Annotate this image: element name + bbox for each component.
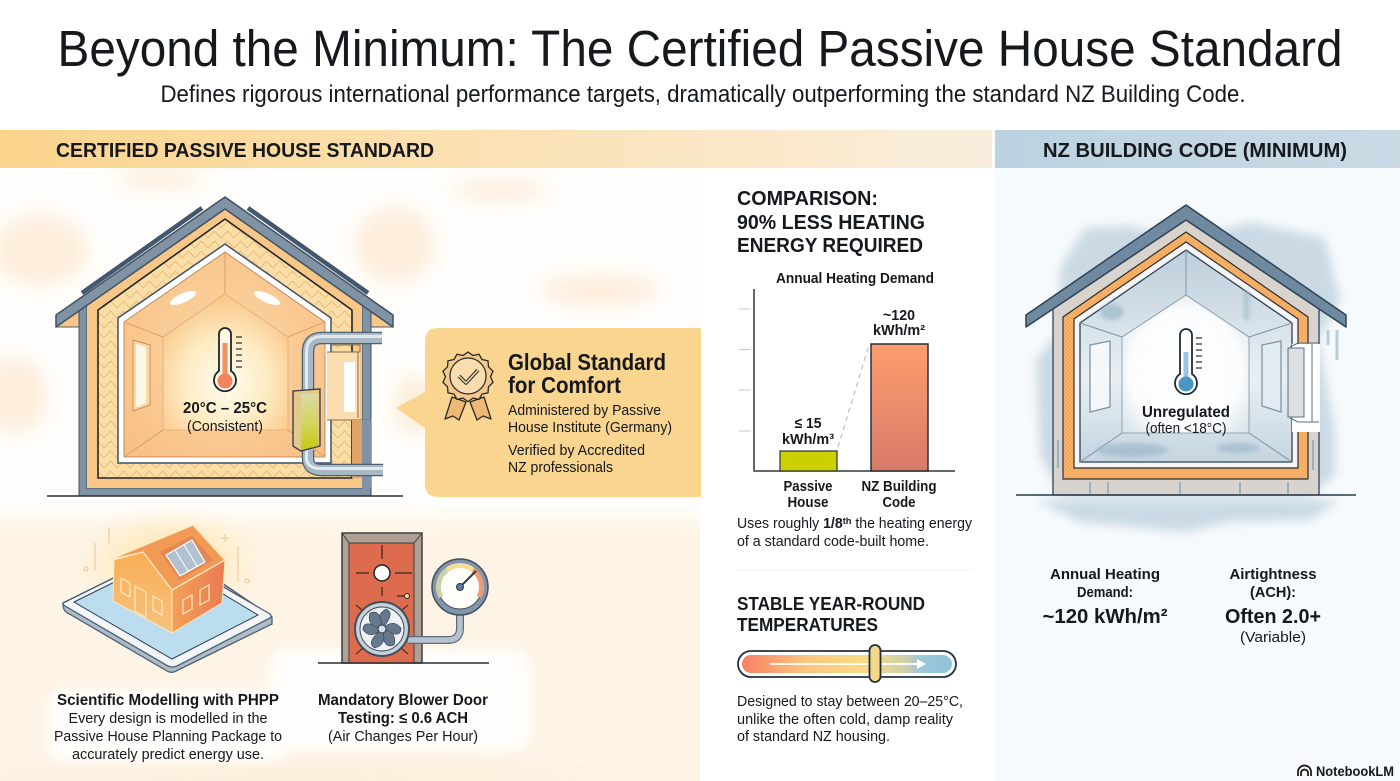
callout text: NZ professionals	[508, 460, 613, 476]
illustration: passive house cross-section	[47, 197, 403, 496]
callout text: House Institute (Germany)	[508, 420, 672, 436]
temperature label: Unregulated	[1142, 404, 1230, 421]
text: blower door testing: (Air Changes Per Hour)	[328, 729, 478, 745]
door markings	[374, 565, 390, 581]
temperature label: 20°C – 25°C	[183, 400, 267, 417]
sparkles	[95, 527, 238, 582]
heading: comparison: 90% LESS HEATING	[737, 212, 925, 234]
axis labels: House	[788, 495, 828, 511]
outer walls	[1053, 220, 1319, 495]
axis labels: NZ Building	[862, 479, 936, 495]
text: blower door testing	[318, 692, 488, 745]
illustration: house model on tablet	[63, 503, 272, 672]
value: nz building code: kWh/m²	[873, 323, 925, 339]
watermark: notebooklm: NotebookLM	[1316, 763, 1394, 779]
floor damp patches	[1096, 290, 1260, 457]
text: chart caption	[737, 516, 973, 550]
roof	[56, 197, 393, 327]
value: nz building code	[873, 307, 925, 339]
insulation band	[87, 207, 362, 488]
ground line	[47, 495, 403, 497]
ground line	[1016, 494, 1356, 496]
text: chart caption: th	[843, 516, 852, 527]
value: nz building code: ~120	[883, 307, 915, 324]
section header: certified passive house standard	[0, 130, 992, 168]
outer wall	[79, 302, 371, 496]
right window	[1262, 341, 1281, 412]
callout: global standard for comfort	[396, 328, 701, 497]
stat: annual heating demand	[1042, 566, 1168, 628]
text: chart caption: Uses roughly 1/8	[737, 516, 843, 532]
gauge tube	[408, 615, 460, 640]
damp stains behind house	[1035, 222, 1340, 532]
text: scientific modelling: Scientific Modelling with PHPP	[57, 692, 279, 709]
model windows	[121, 578, 209, 617]
thermometer	[214, 328, 242, 391]
text: scientific modelling	[54, 692, 282, 763]
drips	[1328, 330, 1337, 360]
subtitle: Defines rigorous international performance targets, dramatically outperforming the standard NZ Building Code.	[160, 81, 1246, 108]
axis labels: Code	[882, 495, 916, 511]
text: scientific modelling: Every design is modelled in the	[68, 711, 268, 727]
callout text: Verified by Accredited	[508, 443, 645, 459]
callout text: Global Standard	[508, 349, 666, 375]
section header: nz building code: NZ BUILDING CODE (MINIMUM)	[1043, 140, 1347, 162]
stat: annual heating demand: ~120 kWh/m²	[1042, 606, 1168, 628]
stat: annual heating demand: Annual Heating	[1050, 566, 1160, 583]
fan	[355, 602, 409, 656]
stat: airtightness: (Variable)	[1240, 629, 1306, 646]
heat recovery unit	[293, 389, 320, 451]
axis labels	[784, 479, 936, 511]
stat: airtightness: (ACH):	[1250, 584, 1296, 601]
solar panels	[82, 208, 368, 293]
solar panel	[160, 536, 213, 580]
callout text: Administered by Passive	[508, 403, 661, 419]
stat: annual heating demand: Demand:	[1077, 584, 1133, 601]
stat: airtightness: Often 2.0+	[1225, 606, 1321, 628]
background wash: left panel	[0, 168, 700, 781]
temperature slider	[738, 645, 956, 682]
slider thumb	[870, 645, 880, 682]
heading: comparison	[737, 188, 925, 257]
insulation layer	[1063, 232, 1308, 479]
text: blower door testing: Testing: ≤ 0.6 ACH	[338, 710, 468, 727]
text: chart caption: the heating energy	[851, 516, 973, 532]
ceiling lights	[168, 288, 198, 308]
bar: passive house	[780, 451, 837, 471]
right window opening	[327, 352, 360, 420]
text: blower door testing: Mandatory Blower Door	[318, 692, 488, 709]
ventilation ducts	[308, 338, 382, 392]
eaves	[56, 306, 393, 327]
bar: nz building code	[871, 344, 928, 471]
door ground line	[318, 662, 489, 664]
heading: stable year-round temperatures	[737, 593, 925, 635]
illustration: nz code house cross-section: (often <18°C)	[1146, 421, 1226, 437]
value: passive house	[782, 415, 834, 448]
icon: rosette badge	[443, 352, 493, 420]
chart title: Annual Heating Demand	[776, 271, 934, 287]
tablet	[63, 549, 272, 672]
section header: certified passive house standard: CERTIFIED PASSIVE HOUSE STANDARD	[56, 140, 434, 162]
text: slider caption: of standard NZ housing.	[737, 729, 890, 745]
heading: stable year-round temperatures: STABLE YEAR-ROUND	[737, 593, 925, 614]
value: passive house: kWh/m³	[782, 432, 834, 448]
background wash: right panel	[995, 168, 1400, 781]
model house	[113, 552, 172, 633]
wall opening	[1292, 344, 1320, 432]
callout text: for Comfort	[508, 372, 621, 398]
door	[349, 543, 414, 663]
text: scientific modelling: Passive House Planning Package to	[54, 729, 282, 745]
illustration: passive house cross-section: (Consistent)	[187, 419, 263, 435]
title: Beyond the Minimum: The Certified Passive House Standard	[58, 20, 1342, 77]
airtight membrane	[118, 244, 331, 463]
section header: nz building code	[995, 130, 1400, 168]
text: scientific modelling: accurately predict energy use.	[72, 747, 264, 763]
illustration: blower door test	[318, 533, 489, 663]
pressure gauge	[432, 559, 488, 615]
door frame	[342, 533, 422, 663]
heading: comparison: ENERGY REQUIRED	[737, 235, 923, 257]
stat: airtightness	[1225, 566, 1321, 646]
glow	[70, 503, 270, 627]
text: slider caption: unlike the often cold, damp reality	[737, 712, 954, 728]
text: slider caption	[737, 694, 963, 745]
axis labels: Passive	[784, 479, 832, 495]
illustration: nz code house cross-section	[1016, 205, 1356, 532]
heading: stable year-round temperatures: TEMPERATURES	[737, 614, 878, 635]
left window	[133, 340, 150, 411]
cold interior	[1080, 250, 1292, 462]
callout text	[508, 349, 672, 476]
value: passive house: ≤ 15	[794, 415, 822, 432]
thermometer	[1175, 329, 1202, 394]
heading: comparison: COMPARISON:	[737, 188, 878, 210]
stat: airtightness: Airtightness	[1230, 566, 1316, 583]
room interior	[124, 252, 325, 457]
insulation hatching	[98, 219, 352, 478]
left window	[1090, 341, 1110, 412]
text: chart caption: of a standard code-built home.	[737, 534, 929, 550]
text: slider caption: Designed to stay between 20–25°C,	[737, 694, 963, 710]
bar chart: annual heating demand	[739, 271, 955, 511]
roof	[1026, 205, 1346, 327]
